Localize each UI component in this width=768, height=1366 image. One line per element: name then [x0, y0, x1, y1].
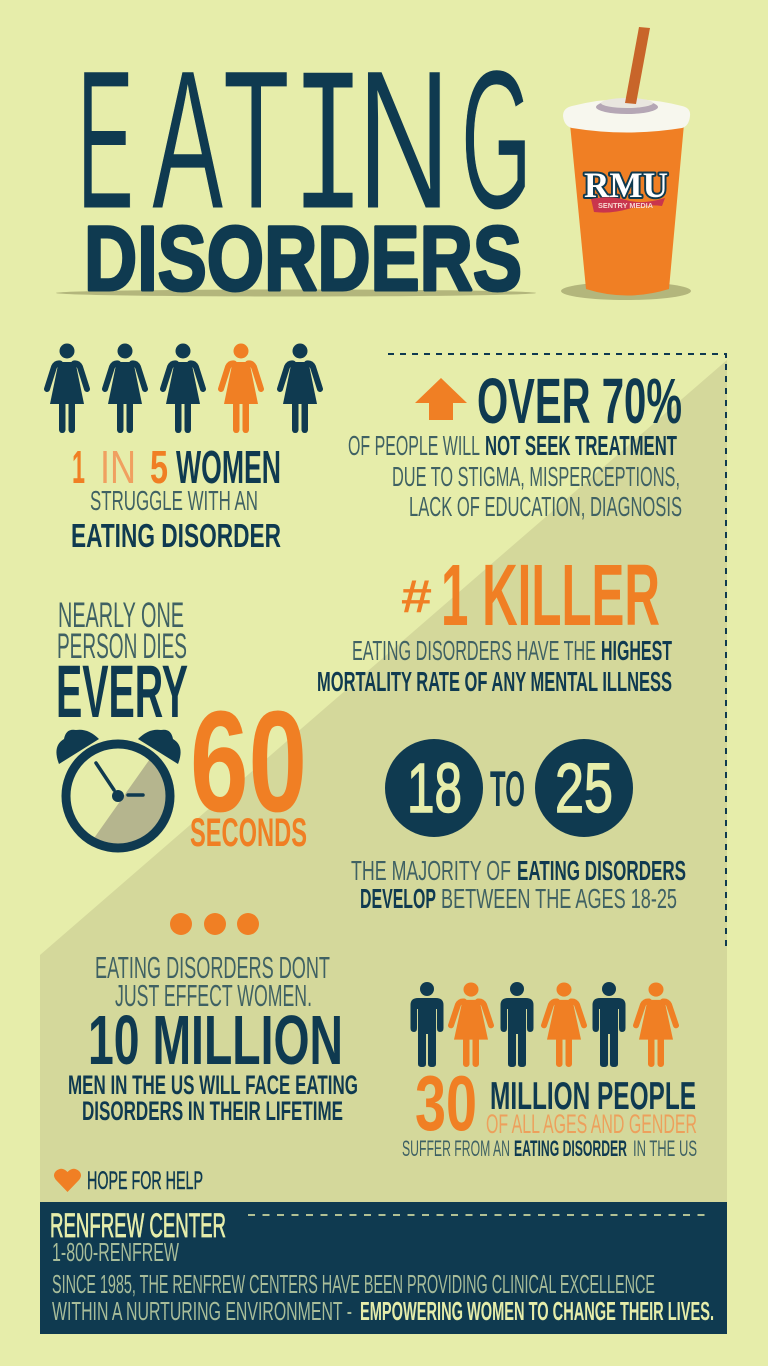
cup body [570, 124, 684, 296]
heading: 1 in 5 women: WOMEN [176, 441, 281, 493]
badge: 18 [385, 739, 483, 837]
cup lid [563, 99, 690, 132]
text: disorders in their lifetime: DISORDERS IN THEIR LIFETIME [82, 1096, 343, 1126]
RMU logo: SENTRY MEDIA [598, 203, 653, 210]
heading: 1 in 5 women: 1 [72, 441, 85, 493]
text: the majority of: THE MAJORITY OF [351, 855, 511, 886]
text: to: TO [490, 761, 525, 817]
title word: EATING: T [223, 28, 290, 250]
heading: 1 in 5 women: IN [100, 441, 136, 493]
text: eating disorders dont: EATING DISORDERS DONT [95, 950, 330, 985]
heading: 1 in 5 women: 5 [150, 441, 168, 493]
text: hope for help: HOPE FOR HELP [87, 1167, 203, 1195]
title word: EATING: G [461, 28, 532, 250]
text: person dies: PERSON DIES [57, 627, 187, 666]
hope for help [54, 1167, 203, 1195]
text: develop between: DEVELOP [360, 883, 436, 914]
text: suffer from an eating disorder: EATING DISORDER [514, 1136, 627, 1161]
text: men in the us: MEN IN THE US WILL FACE EATING [68, 1070, 358, 1100]
panel: over 70% [348, 365, 682, 522]
badge: 18: 18 [407, 749, 462, 827]
text: suffer from an eating disorder [402, 1136, 697, 1161]
panel: #1 killer [317, 547, 672, 697]
text: nearly one: NEARLY ONE [58, 596, 184, 635]
cup shadow [561, 282, 691, 300]
title word: EATING: I [291, 38, 365, 271]
text: eating disorder: EATING DISORDER [71, 517, 281, 554]
text: highest: HIGHEST [601, 635, 672, 666]
icon: alarm clock [56, 730, 181, 851]
title word: DISORDERS: DISORDERS [84, 208, 522, 310]
panel: 30 million people [402, 982, 697, 1161]
panel: 10 million men [68, 950, 358, 1126]
text: develop between [360, 883, 677, 914]
banner background [40, 1202, 727, 1334]
text: will not seek treatment: OF PEOPLE WILL [348, 430, 480, 461]
dashed frame line [388, 354, 726, 950]
heading: #1 killer [401, 547, 660, 644]
icon: row of men and women [410, 982, 676, 1067]
cup straw [625, 27, 650, 104]
text: struggle with an: STRUGGLE WITH AN [90, 485, 258, 516]
heading: #1 killer: # [401, 570, 432, 622]
text: phone number: 1-800-RENFREW [52, 1237, 179, 1267]
lid ring [596, 100, 658, 114]
icon: heart [54, 1169, 81, 1192]
title word: EATING: N [357, 29, 451, 251]
shaded diagonal panel [40, 360, 727, 1210]
text: within a nurturing environment: WITHIN A NURTURING ENVIRONMENT - [52, 1296, 352, 1326]
heading: 10 million: 10 MILLION [88, 1001, 343, 1079]
badge: 25 [535, 739, 633, 837]
title [56, 28, 536, 310]
text: suffer from an eating disorder: SUFFER FROM AN [402, 1136, 510, 1161]
icon: row of five women [47, 344, 320, 433]
number: 30: 30 [415, 1059, 477, 1147]
number: 60: 60 [190, 681, 307, 842]
title word: EATING: E [77, 30, 134, 251]
icon: three dots [170, 913, 259, 935]
icon: up arrow [415, 378, 467, 420]
icon: drink cup [561, 27, 691, 300]
dashed rule [248, 1214, 705, 1216]
text: just effect women: JUST EFFECT WOMEN. [115, 978, 312, 1013]
text: seconds: SECONDS [190, 811, 307, 855]
badge: 25: 25 [555, 749, 613, 827]
RMU logo: RMU [584, 165, 668, 205]
title shadow [56, 290, 536, 296]
heading: renfrew center: RENFREW CENTER [50, 1207, 226, 1245]
title word: EATING [77, 28, 532, 271]
panel: renfrew center banner [40, 1202, 727, 1334]
panel: nearly one person dies [56, 596, 307, 855]
title word: EATING: A [152, 29, 223, 250]
text: every: EVERY [56, 650, 188, 733]
panel: 1 in 5 women [47, 344, 320, 554]
text: highest: EATING DISORDERS HAVE THE [352, 635, 596, 666]
heading: 1 in 5 women [72, 441, 281, 493]
text: suffer from an eating disorder: IN THE US [633, 1136, 697, 1161]
RMU logo: RMU [584, 165, 668, 205]
panel: 18 to 25 [351, 739, 686, 914]
